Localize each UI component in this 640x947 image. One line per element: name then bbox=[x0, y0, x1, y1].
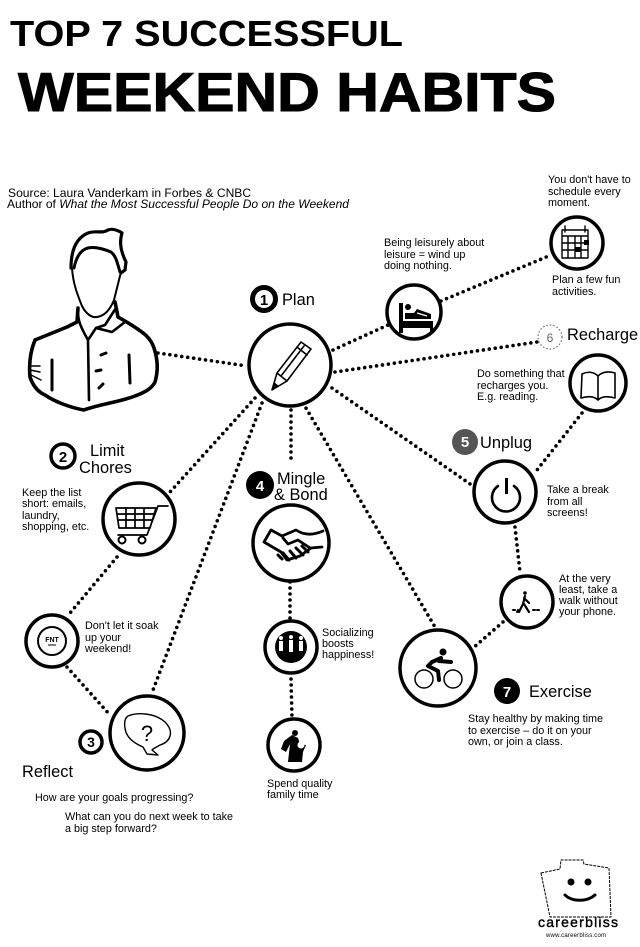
source text: Author of What the Most Successful People Do on the Weekend bbox=[7, 197, 350, 211]
icon: speech bubble question: ? bbox=[141, 721, 153, 746]
sub-habit: walk bbox=[501, 573, 618, 628]
logo: careerbliss bbox=[538, 860, 618, 939]
title: WEEKEND HABITS bbox=[18, 61, 556, 123]
icon: bicycle bbox=[400, 630, 476, 706]
text: walk: At the very bbox=[559, 573, 611, 585]
text: chores list: short: emails, bbox=[22, 498, 86, 510]
text: socializing: Socializing bbox=[322, 627, 374, 639]
text: family: family time bbox=[267, 789, 319, 801]
title: TOP 7 SUCCESSFUL bbox=[10, 13, 403, 54]
source text: Source: Laura Vanderkam in Forbes & CNBC bbox=[8, 186, 251, 200]
text: exercise: own, or join a class. bbox=[468, 736, 563, 748]
badge 7 bbox=[494, 678, 520, 704]
text: walk: walk without bbox=[558, 595, 618, 607]
badge 4: 4 bbox=[256, 478, 265, 495]
sub-habit: calendar bbox=[548, 174, 631, 298]
badge 2: 2 bbox=[59, 449, 67, 466]
text: take a break: Take a break bbox=[547, 484, 609, 496]
text: chores list: laundry, bbox=[22, 510, 60, 522]
text: walk: least, take a bbox=[559, 584, 617, 596]
text: soak: up your bbox=[85, 632, 121, 644]
text: schedule: You don't have to bbox=[548, 174, 631, 186]
habit 2: limit chores bbox=[22, 442, 175, 555]
badge 5 bbox=[452, 429, 478, 455]
badge 6: 6 bbox=[547, 331, 554, 345]
habit 3: reflect bbox=[22, 696, 233, 835]
text: chores list: shopping, etc. bbox=[22, 521, 89, 533]
text: fun activities: activities. bbox=[552, 286, 596, 298]
icon: family bbox=[268, 719, 320, 771]
text: socializing: happiness! bbox=[322, 649, 374, 661]
heading: reflect: Reflect bbox=[22, 763, 73, 781]
heading: mingle and bond: Mingle bbox=[277, 470, 325, 488]
habit 7: exercise bbox=[400, 630, 603, 748]
heading: plan: Plan bbox=[282, 291, 315, 309]
heading: unplug: Unplug bbox=[480, 434, 532, 452]
badge 3: 3 bbox=[87, 734, 95, 750]
text: socializing: boosts bbox=[322, 638, 354, 650]
text: leisure: Being leisurely about bbox=[384, 237, 484, 249]
text: recharge: Do something that bbox=[477, 368, 565, 380]
text: exercise: to exercise – do it on your bbox=[468, 725, 592, 737]
icon: book bbox=[570, 355, 626, 411]
habit 1: plan bbox=[249, 288, 331, 406]
icon: calendar bbox=[551, 217, 603, 269]
text: take a break: from all bbox=[547, 496, 582, 508]
badge 7: 7 bbox=[503, 684, 511, 701]
habit 5: unplug bbox=[452, 429, 609, 523]
icon: power bbox=[474, 461, 536, 523]
text: family: Spend quality bbox=[267, 778, 332, 790]
text: schedule: moment. bbox=[548, 197, 590, 209]
icon: cart bbox=[103, 483, 175, 555]
badge 5: 5 bbox=[461, 434, 469, 451]
habit 4: mingle and bond bbox=[246, 470, 329, 581]
badge 2 bbox=[51, 444, 75, 468]
sub-habit: soak up weekend bbox=[26, 615, 159, 667]
text: fun activities: Plan a few fun bbox=[552, 274, 620, 286]
text: leisure: leisure = wind up bbox=[384, 249, 465, 261]
heading: limit chores: Limit bbox=[90, 442, 125, 460]
logo: careerbliss: careerbliss bbox=[538, 914, 618, 930]
icon: speech bubble question bbox=[110, 696, 184, 770]
text: soak: Don't let it soak bbox=[85, 620, 158, 632]
heading: mingle and bond: & Bond bbox=[274, 486, 328, 504]
text: recharge: recharges you. bbox=[477, 380, 548, 392]
badge 6 bbox=[538, 325, 562, 349]
text: schedule: schedule every bbox=[548, 186, 621, 198]
sub-habit: family bbox=[267, 719, 333, 801]
dotted connectors bbox=[67, 255, 582, 718]
sub-habit: socializing bbox=[265, 621, 374, 673]
icon: walk bbox=[501, 576, 553, 628]
text: recharge: E.g. reading. bbox=[477, 391, 538, 403]
icon: bed bbox=[387, 285, 441, 339]
text: reflect question two: a big step forward? bbox=[65, 823, 157, 835]
sub-habit: leisure bbox=[384, 237, 484, 339]
icon: pencil bbox=[249, 324, 331, 406]
badge 1: 1 bbox=[260, 292, 268, 309]
icon: person bbox=[30, 229, 157, 410]
badge 3 bbox=[80, 731, 102, 753]
title bbox=[10, 13, 556, 123]
icon: handshake bbox=[253, 505, 329, 581]
text: take a break: screens! bbox=[547, 507, 588, 519]
text: leisure: doing nothing. bbox=[384, 260, 452, 272]
icon: weekend clock: FNT bbox=[45, 637, 60, 644]
icon: group bbox=[265, 621, 317, 673]
text: soak: weekend! bbox=[84, 643, 131, 655]
text: chores list: Keep the list bbox=[22, 487, 81, 499]
heading: exercise: Exercise bbox=[529, 683, 592, 701]
text: reflect question one: How are your goals progressing? bbox=[35, 792, 193, 804]
heading: limit chores: Chores bbox=[79, 459, 132, 477]
text: walk: your phone. bbox=[559, 606, 616, 618]
text: reflect question two: What can you do next week to take bbox=[65, 811, 233, 823]
source text bbox=[7, 186, 350, 211]
heading: recharge: Recharge bbox=[567, 326, 638, 344]
habit 6: recharge bbox=[477, 325, 638, 411]
text: exercise: Stay healthy by making time bbox=[468, 713, 603, 725]
logo: careerbliss: www.careerbliss.com bbox=[545, 933, 606, 939]
